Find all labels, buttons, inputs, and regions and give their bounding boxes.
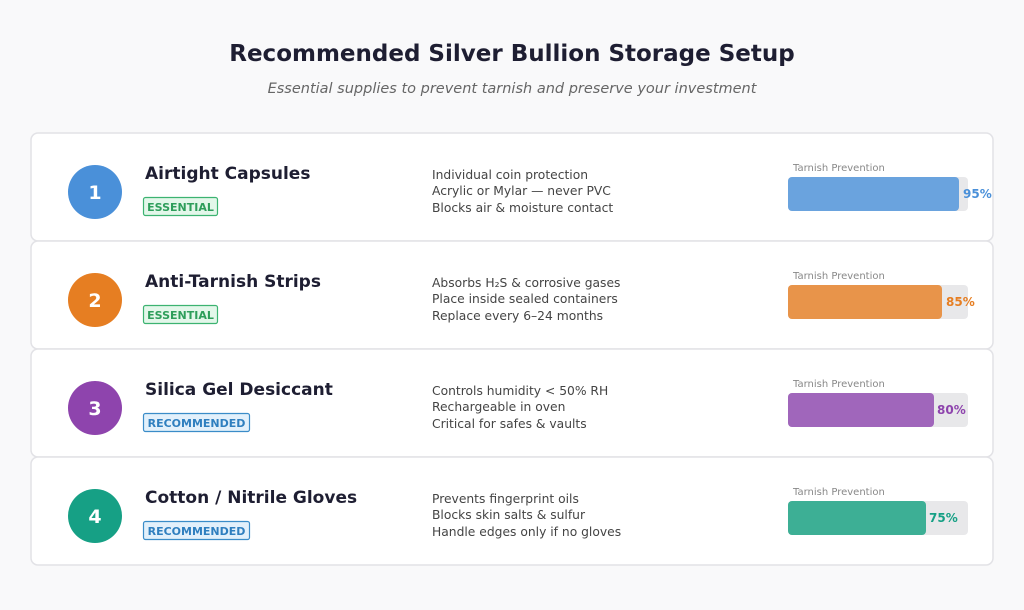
bar chart: [788, 271, 975, 319]
text block: Critical for safes & vaults: [432, 417, 587, 431]
text block: Rechargeable in oven: [432, 400, 565, 414]
panel: anti-tarnish strips: [31, 241, 993, 349]
bar chart: Tarnish Prevention: [792, 379, 885, 390]
heading: Cotton / Nitrile Gloves: [145, 488, 357, 508]
badge: ESSENTIAL: [147, 309, 214, 322]
icon: number 3: [68, 381, 122, 435]
subtitle: Essential supplies to prevent tarnish and preserve your investment: [268, 81, 758, 97]
bar chart: 85%: [946, 295, 975, 309]
bar chart: 75%: [929, 511, 958, 525]
bar chart: Tarnish Prevention: [792, 487, 885, 498]
text block: Prevents fingerprint oils: [432, 492, 579, 506]
icon: number 1: [68, 165, 122, 219]
bar chart: Tarnish Prevention: [792, 163, 885, 174]
text block: Replace every 6–24 months: [432, 309, 603, 323]
panel: gloves: [31, 457, 993, 565]
text block: Place inside sealed containers: [432, 292, 618, 306]
bar chart: [788, 487, 968, 535]
text block: Absorbs H₂S & corrosive gases: [432, 276, 620, 290]
badge: RECOMMENDED: [148, 525, 245, 538]
badge: [144, 414, 250, 432]
icon: number 2: [68, 273, 122, 327]
panel: silica gel: [31, 349, 993, 457]
icon: number 2: 2: [88, 290, 102, 312]
icon: number 4: 4: [88, 506, 102, 528]
panel: airtight capsules: [31, 133, 993, 241]
bar chart: 80%: [937, 403, 966, 417]
text block: Blocks skin salts & sulfur: [432, 508, 586, 522]
heading: Anti-Tarnish Strips: [145, 272, 321, 292]
text block: Blocks air & moisture contact: [432, 201, 613, 215]
badge: [144, 198, 218, 216]
text block: [432, 492, 621, 539]
text block: [432, 168, 613, 215]
badge: [144, 306, 218, 324]
badge: ESSENTIAL: [147, 201, 214, 214]
bar chart: 95%: [963, 187, 992, 201]
title: Recommended Silver Bullion Storage Setup: [229, 41, 795, 67]
icon: number 3: 3: [88, 398, 102, 420]
text block: [432, 276, 620, 323]
text block: Controls humidity < 50% RH: [432, 384, 608, 398]
heading: Airtight Capsules: [145, 164, 310, 184]
bar chart: [788, 163, 992, 211]
badge: [144, 522, 250, 540]
text block: Handle edges only if no gloves: [432, 525, 621, 539]
badge: RECOMMENDED: [148, 417, 245, 430]
icon: number 4: [68, 489, 122, 543]
heading: Silica Gel Desiccant: [145, 380, 333, 400]
text block: Individual coin protection: [432, 168, 588, 182]
text block: [432, 384, 608, 431]
bar chart: Tarnish Prevention: [792, 271, 885, 282]
text block: Acrylic or Mylar — never PVC: [432, 184, 611, 198]
bar chart: [788, 379, 968, 427]
icon: number 1: 1: [88, 182, 102, 204]
